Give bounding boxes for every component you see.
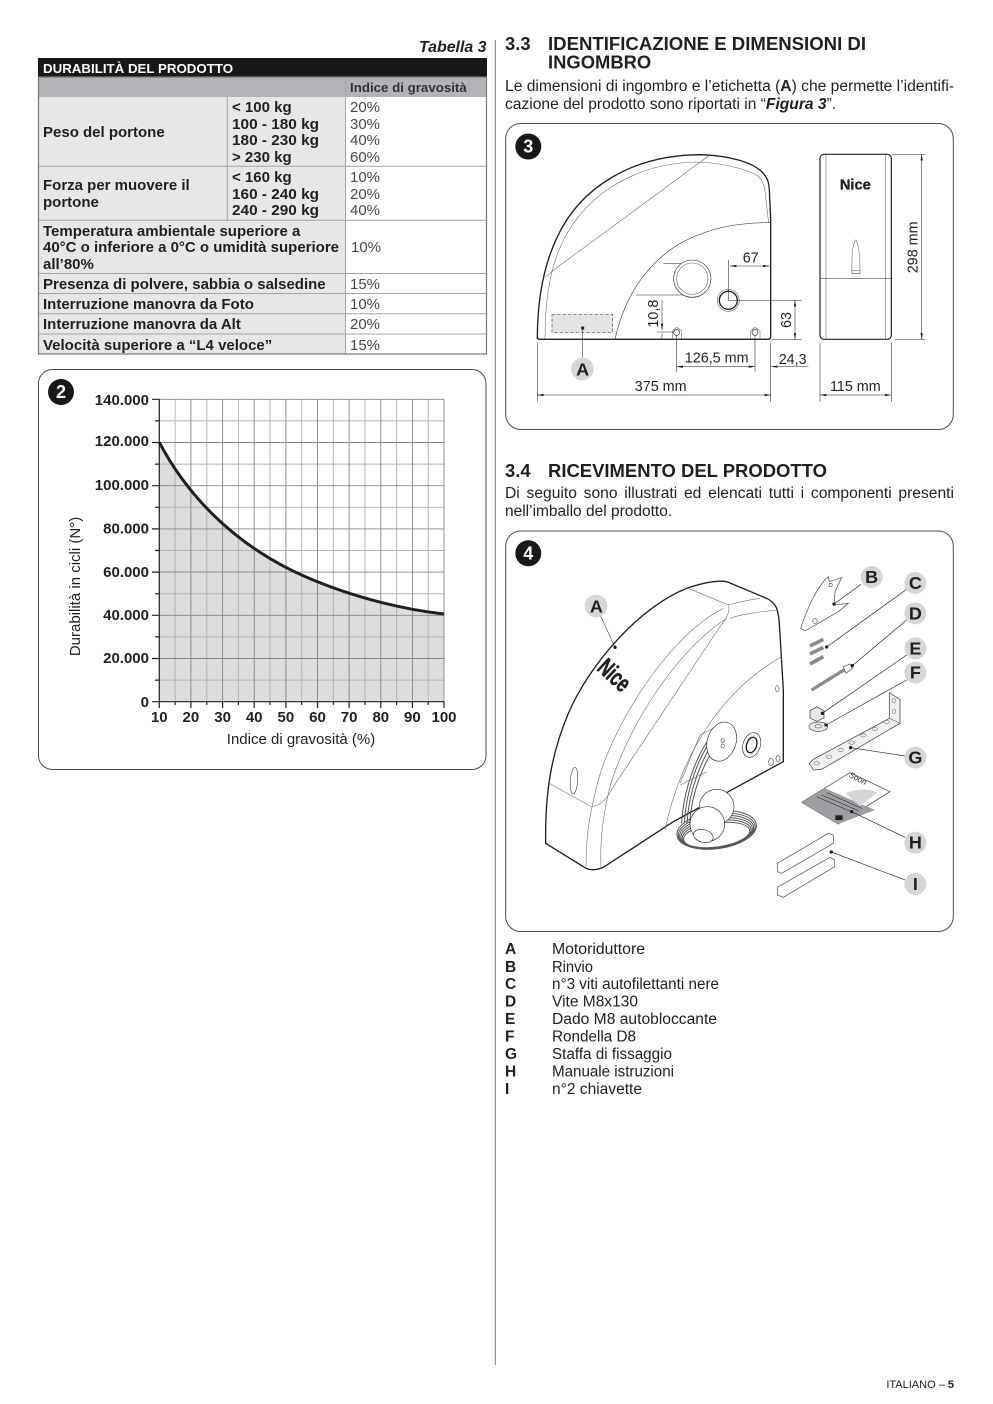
y axis labels: 0: [141, 694, 149, 711]
table: durabilità del prodotto: 40%: [350, 202, 380, 219]
legend of components: n°2 chiavette: [552, 1081, 642, 1098]
table: durabilità del prodotto: Presenza di polvere, sabbia o salsedine: [43, 276, 326, 293]
table: durabilità del prodotto: 10%: [350, 169, 380, 186]
dimension values: 126,5 mm: [685, 350, 749, 366]
part F: washer: [809, 722, 828, 731]
legend of components: I: [505, 1081, 509, 1098]
legend of components: F: [505, 1028, 514, 1046]
part badges: G: [908, 748, 922, 768]
table: durabilità del prodotto: 30%: [350, 116, 380, 133]
table: durabilità del prodotto: 10%: [350, 296, 380, 313]
x axis labels: 70: [341, 709, 357, 726]
table: durabilità del prodotto: DURABILITÀ DEL PRODOTTO: [43, 61, 233, 76]
motor side view: [537, 155, 771, 339]
part badges: H: [909, 833, 922, 853]
table: durabilità del prodotto: 20%: [350, 99, 380, 116]
badge 2: 2: [56, 382, 66, 402]
dimension values: 67: [743, 251, 759, 267]
legend of components: Manuale istruzioni: [552, 1064, 674, 1080]
table: durabilità del prodotto: portone: [43, 194, 99, 211]
table: durabilità del prodotto: 240 - 290 kg: [232, 202, 319, 219]
table: durabilità del prodotto: Interruzione manovra da Alt: [43, 316, 241, 333]
part G: fixing bracket: [809, 693, 900, 770]
legend of components: A: [505, 941, 516, 958]
page footer: ITALIANO – 5: [886, 1379, 954, 1391]
x axis labels: 100: [431, 709, 457, 726]
table: durabilità del prodotto: 15%: [350, 337, 380, 354]
part C: screws: [810, 639, 823, 664]
y axis labels: 40.000: [103, 607, 149, 624]
table: durabilità del prodotto: 10%: [351, 239, 381, 256]
legend of components: n°3 viti autofilettanti nere: [552, 976, 719, 993]
table: durabilità del prodotto: < 160 kg: [232, 169, 292, 186]
legend of components: D: [505, 994, 516, 1010]
x axis labels: 20: [183, 709, 199, 726]
y axis labels: 20.000: [103, 650, 149, 667]
table: durabilità del prodotto: 60%: [350, 149, 380, 166]
motor illustration: A: [590, 596, 603, 616]
x axis labels: 90: [404, 709, 421, 726]
badge 4: [515, 540, 541, 566]
motor front view: [820, 154, 891, 339]
x axis labels: 40: [246, 709, 263, 726]
y axis labels: 140.000: [95, 392, 149, 409]
parts illustrations: [777, 566, 926, 897]
table: durabilità del prodotto: > 230 kg: [232, 149, 292, 166]
y axis labels: 100.000: [95, 477, 149, 494]
dimension values: 115 mm: [830, 379, 881, 395]
x axis labels: 80: [372, 709, 389, 726]
text block 3.4: [505, 485, 954, 520]
y axis labels: 80.000: [103, 520, 149, 538]
legend of components: [505, 941, 719, 1098]
table: durabilità del prodotto: 40%: [350, 132, 380, 149]
table: durabilità del prodotto: < 100 kg: [232, 99, 292, 116]
motor front view: Nice: [840, 177, 871, 193]
legend of components: Motoriduttore: [552, 941, 645, 958]
dimension lines: [537, 154, 925, 402]
y axis labels: [95, 392, 149, 711]
dimension values: 24,3: [779, 352, 807, 368]
heading 3.4: 3.4: [505, 460, 531, 481]
table: durabilità del prodotto: Peso del portone: [43, 124, 165, 141]
table: durabilità del prodotto: 40°C o inferiore a 0°C o umidità superiore: [43, 239, 339, 256]
motor illustration: [546, 581, 783, 870]
drawing: motor dimensions: [537, 154, 925, 402]
part H: instruction manual: [802, 770, 890, 824]
x axis labels: 60: [309, 709, 326, 726]
y axis labels: 60.000: [103, 564, 149, 581]
table: durabilità del prodotto: 15%: [350, 276, 380, 293]
table: durabilità del prodotto: all’80%: [43, 256, 94, 273]
dimension values: 10,8: [646, 300, 662, 328]
legend of components: H: [505, 1064, 516, 1080]
dimension values: [635, 221, 921, 395]
heading 3.3: [505, 33, 866, 72]
dimension values: 298 mm: [905, 221, 921, 273]
part badges: C: [909, 573, 922, 593]
y axis labels: 120.000: [95, 433, 149, 450]
table: durabilità del prodotto: Forza per muovere il: [43, 177, 190, 194]
table: durabilità del prodotto: Indice di gravosità: [350, 80, 467, 95]
part E: nut: [810, 707, 824, 721]
dimension values: 63: [779, 312, 795, 328]
legend of components: C: [505, 976, 516, 993]
table: durabilità del prodotto: 160 - 240 kg: [232, 186, 319, 203]
part badges: D: [909, 603, 922, 623]
table: durabilità del prodotto: 100 - 180 kg: [232, 116, 319, 133]
panel: figure 2 durability chart: [38, 370, 486, 770]
legend of components: Rondella D8: [552, 1028, 636, 1046]
badge 4: 4: [523, 544, 533, 564]
table: durabilità del prodotto: [38, 58, 487, 354]
legend of components: B: [505, 959, 516, 976]
legend of components: Dado M8 autobloccante: [552, 1011, 717, 1028]
text block 3.4: nell’imballo del prodotto.: [505, 503, 672, 520]
heading 3.3: INGOMBRO: [548, 52, 651, 72]
legend of components: E: [505, 1011, 515, 1028]
motor illustration: Nice: [592, 654, 636, 697]
durability curve: [159, 442, 444, 614]
label area A: A: [576, 359, 589, 379]
dimension values: 375 mm: [635, 379, 687, 395]
x axis labels: 50: [278, 709, 294, 726]
part H: instruction manual: Soon: [847, 770, 869, 787]
table: durabilità del prodotto: Temperatura ambientale superiore a: [43, 223, 301, 240]
axes and ticks: [152, 399, 444, 708]
text block 3.3: Le dimensioni di ingombro e l’etichetta (A) che permette l’identifi-: [505, 78, 954, 95]
part D: long screw: [812, 664, 852, 690]
legend of components: Rinvio: [552, 959, 593, 976]
panel: figure 4 components: [506, 531, 953, 932]
part I: two keys: [777, 833, 835, 897]
part badges: E: [909, 638, 921, 658]
panel: figure 3 dimensions: [506, 124, 953, 430]
heading 3.3: 3.3: [505, 33, 531, 54]
text block 3.3: cazione del prodotto sono riportati in “Figura 3”.: [505, 96, 836, 113]
legend of components: Vite M8x130: [552, 994, 638, 1010]
part badges: I: [913, 874, 918, 894]
table: durabilità del prodotto: Velocità superiore a “L4 veloce”: [43, 337, 272, 354]
area under curve: [159, 442, 444, 702]
table caption: Tabella 3: [419, 39, 487, 56]
text block 3.4: Di seguito sono illustrati ed elencati tutti i componenti presenti: [505, 485, 954, 502]
table: durabilità del prodotto: Interruzione manovra da Foto: [43, 296, 254, 313]
legend of components: G: [505, 1046, 517, 1063]
text block 3.3: [505, 78, 954, 113]
part badges: F: [910, 663, 921, 683]
badge 3: [515, 134, 541, 160]
table: durabilità del prodotto: 20%: [350, 186, 380, 203]
x axis labels: 10: [151, 709, 168, 726]
y axis title: Durabilità in cicli (N°): [67, 517, 84, 656]
part badges: B: [865, 567, 878, 587]
x axis title: Indice di gravosità (%): [227, 731, 375, 748]
part B: pulley bracket: [801, 577, 848, 631]
x axis labels: [151, 709, 457, 726]
leader lines: [821, 584, 907, 880]
heading 3.3: IDENTIFICAZIONE E DIMENSIONI DI: [548, 34, 866, 54]
badge 2: [48, 379, 74, 405]
badge 3: 3: [523, 136, 533, 156]
table: durabilità del prodotto: 180 - 230 kg: [232, 132, 319, 149]
legend of components: Staffa di fissaggio: [552, 1046, 672, 1063]
table: durabilità del prodotto: 20%: [350, 316, 380, 333]
label area A: [552, 315, 613, 380]
part badges: [861, 566, 926, 895]
x axis labels: 30: [214, 709, 231, 726]
heading 3.4: RICEVIMENTO DEL PRODOTTO: [548, 460, 827, 481]
